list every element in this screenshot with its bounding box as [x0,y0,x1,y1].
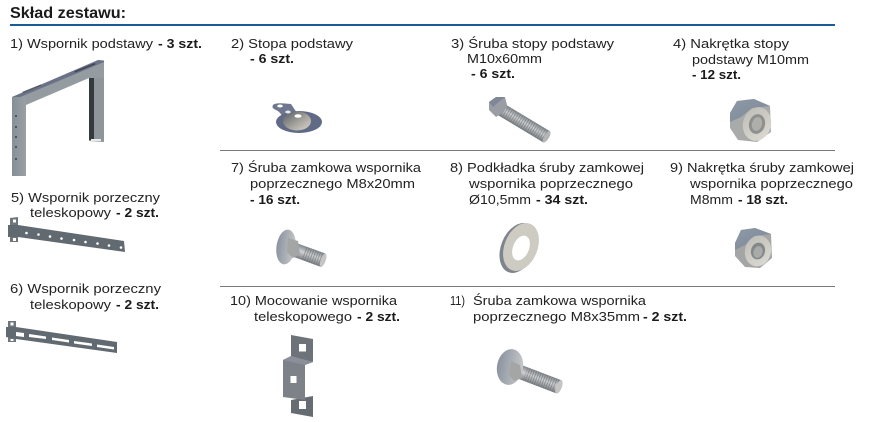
item 4 label: podstawy M10mm [692,52,809,67]
item 11 label: poprzecznego M8x35mm [473,309,640,324]
item 9 label: wspornika poprzecznego [689,176,853,191]
item 11 label: 11) [450,293,465,308]
item 10 label: - 2 szt. [357,309,400,324]
item 5 label: teleskopowy [30,205,112,220]
item 6 label [10,281,162,312]
item 2 label: - 6 szt. [250,51,294,66]
item 4 label: 4) Nakrętka stopy [673,36,790,51]
item 7 label: poprzecznego M8x20mm [250,176,415,191]
item 1 label [10,36,202,51]
item 11 label: - 2 szt. [643,309,687,324]
item 2 label [231,36,354,66]
item 5 label: - 2 szt. [116,205,159,220]
item 3 label: 3) Śruba stopy podstawy [451,36,615,51]
item 1 label: 1) Wspornik podstawy [10,36,154,51]
item 5 label: 5) Wspornik porzeczny [11,190,161,205]
item 9 label [670,160,854,207]
item 3 label [451,36,615,81]
item 2 label: 2) Stopa podstawy [231,36,354,51]
icon: base bracket [12,60,104,176]
item 4 label [673,36,809,82]
header rule [10,24,835,26]
item 7 label: - 16 szt. [250,192,300,207]
item 8 label [450,160,644,207]
item 10 label: 10) Mocowanie wspornika [230,293,398,308]
item 9 label: M8mm [690,192,733,207]
item 8 label: - 34 szt. [536,192,588,207]
icon: telescopic mount plate [283,335,313,417]
item 8 label: wspornika poprzecznego [468,176,633,191]
item 11 label: Śruba zamkowa wspornika [473,293,647,308]
icon: carriage bolt M8x35 [494,347,564,394]
item 10 label: teleskopowego [254,309,352,324]
item 9 label: - 18 szt. [738,192,788,207]
item 7 label [231,160,422,207]
row divider 2 [220,286,835,287]
icon: M10 nut [730,99,775,144]
row divider 1 [220,150,835,151]
item 6 label: teleskopowy [30,297,112,312]
item 8 label: 8) Podkładka śruby zamkowej [450,160,644,175]
icon: washer [492,218,546,278]
item 3 label: - 6 szt. [471,66,515,81]
item 10 label [230,293,400,324]
item 8 label: Ø10,5mm [469,192,531,207]
item 6 label: 6) Wspornik porzeczny [10,281,162,296]
item 6 label: - 2 szt. [116,297,159,312]
icon: base foot [272,103,322,133]
item 9 label: 9) Nakrętka śruby zamkowej [670,160,854,175]
item 1 label: - 3 szt. [158,36,202,51]
icon: carriage bolt M8x20 [274,228,328,268]
icon: hex bolt [489,97,552,144]
item 5 label [11,190,161,220]
title: Skład zestawu: [10,5,126,22]
icon: telescopic bracket with round holes [8,217,125,252]
icon: M8 nut [735,228,775,269]
item 11 label [450,293,687,324]
item 7 label: 7) Śruba zamkowa wspornika [231,160,422,175]
item 4 label: - 12 szt. [692,67,741,82]
item 3 label: M10x60mm [467,51,542,66]
icon: telescopic bracket with slots [6,321,117,353]
